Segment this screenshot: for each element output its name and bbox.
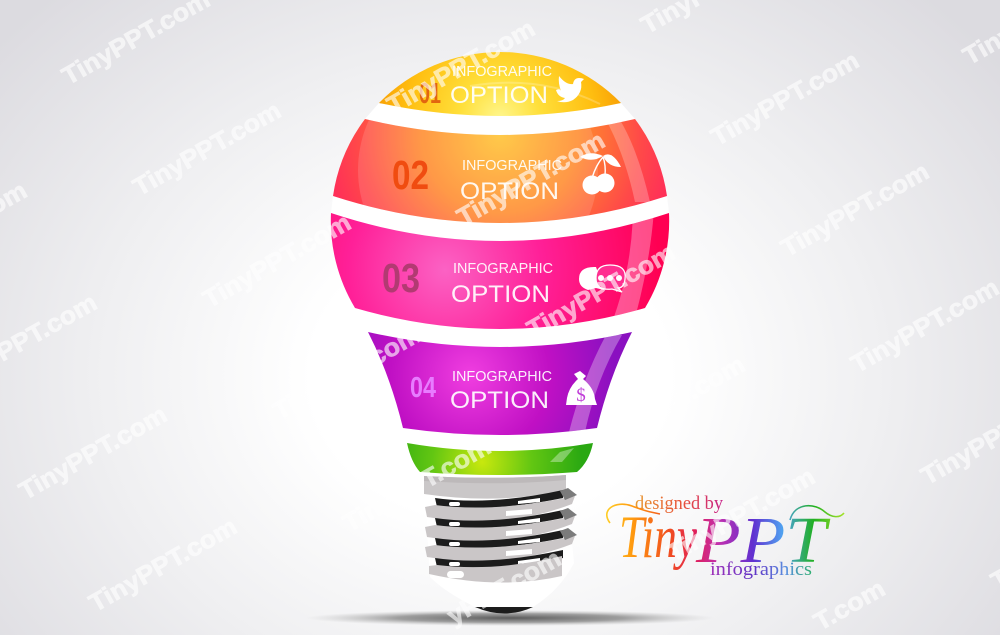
screw base — [424, 475, 577, 614]
thread 1 — [425, 488, 577, 521]
thread 2 — [425, 508, 577, 541]
number 01: 01 — [419, 78, 441, 110]
segment 5: green — [407, 443, 593, 475]
watermarks: TinyPPT.com — [522, 238, 680, 344]
watermarks: yPPT.com — [442, 544, 566, 631]
watermarks: TinyPPT.com — [268, 320, 426, 426]
icon: chat bubbles — [579, 265, 625, 292]
watermarks: TinyPPT.com — [14, 400, 172, 506]
PPT script: PPT — [695, 504, 831, 577]
watermarks: TinyPPT.com — [198, 208, 356, 314]
icon: twitter bird — [556, 76, 584, 102]
watermarks: TinyPPT.com — [846, 273, 1000, 379]
watermarks: TinyPPT.com — [776, 157, 934, 263]
bulb white body — [331, 103, 669, 607]
label 2: INFOGRAPHIC — [462, 157, 562, 174]
icon: money bag: $ — [576, 385, 586, 406]
thread 3 — [425, 528, 577, 561]
option 4: OPTION — [450, 387, 549, 414]
icon: cherries — [580, 153, 621, 194]
thread 4 — [429, 550, 563, 583]
option 1: OPTION — [450, 82, 548, 109]
swash — [607, 504, 844, 523]
number 02: 02 — [392, 152, 429, 198]
label 3: INFOGRAPHIC — [453, 260, 553, 277]
logo: designed by TinyPPT infographics — [607, 493, 844, 580]
ground shadow — [305, 610, 715, 626]
watermarks: TinyPPT.com — [452, 126, 610, 232]
watermarks: TinyPPT.com — [338, 432, 496, 538]
icon: money bag — [566, 371, 597, 406]
number 04: 04 — [410, 372, 436, 404]
watermarks: T.com — [809, 574, 890, 635]
watermarks: TinyPPT.com — [84, 512, 242, 618]
Tiny script: Tiny — [619, 504, 697, 570]
infographics: infographics — [710, 559, 812, 580]
option 2: OPTION — [460, 178, 559, 205]
label 1: INFOGRAPHIC — [452, 63, 552, 80]
option 3: OPTION — [451, 281, 550, 308]
segment 2: orange red — [333, 119, 667, 223]
watermarks: TinyPPT.com — [382, 14, 540, 120]
watermarks: TinyPPT.com — [128, 96, 286, 202]
label 4: INFOGRAPHIC — [452, 368, 552, 385]
watermarks: TinyPPT.com — [592, 350, 750, 456]
watermarks: TinyPPT.com — [662, 462, 820, 568]
watermarks: TinyPPT.com — [706, 46, 864, 152]
segment 3: pink — [331, 210, 669, 329]
segment 4: purple — [368, 332, 632, 435]
neck — [424, 475, 566, 499]
number 03: 03 — [382, 255, 420, 301]
light bulb — [331, 50, 669, 614]
designed by: designed by — [635, 493, 723, 514]
segment 1: yellow — [379, 52, 621, 116]
black tip — [475, 607, 533, 614]
